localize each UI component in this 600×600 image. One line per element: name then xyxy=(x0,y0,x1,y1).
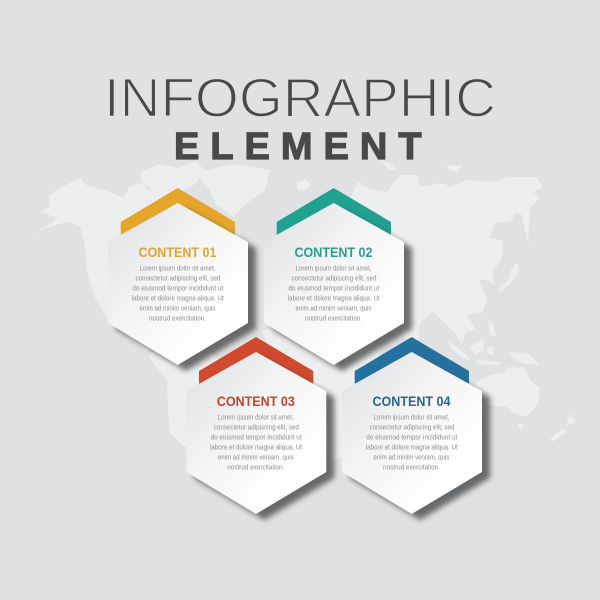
panel: content 03 xyxy=(186,337,334,520)
map: new zealand xyxy=(550,413,576,442)
hexagon card xyxy=(186,352,326,514)
heading: CONTENT 01 xyxy=(138,245,217,260)
title: INFOGRAPHIC xyxy=(104,66,496,128)
heading: CONTENT 03 xyxy=(217,394,295,409)
body text: consectetur adipiscing elit, sed xyxy=(370,422,454,432)
body text: labore et dolore magna aliqua. Ut xyxy=(210,442,302,452)
chevron: blue xyxy=(355,337,469,385)
body text: nostrud exercitation. xyxy=(383,462,440,472)
body text xyxy=(210,412,302,472)
chevron: teal xyxy=(277,188,391,236)
hexagon shadow xyxy=(116,209,256,371)
map: greenland xyxy=(200,164,270,217)
body text: Lorem ipsum dolor sit amet, xyxy=(218,412,294,422)
map: south america xyxy=(148,345,240,450)
body text: nostrud exercitation. xyxy=(149,314,206,322)
map: arctic islands xyxy=(140,161,205,192)
body text: consectetur adipiscing elit, sed xyxy=(292,274,376,282)
map: africa xyxy=(262,325,380,460)
body text: Lorem ipsum dolor sit amet, xyxy=(374,412,450,422)
hexagon shadow xyxy=(272,209,412,371)
body text: do eiusmod tempor incididunt ut xyxy=(288,284,379,292)
heading: CONTENT 02 xyxy=(294,245,373,260)
map: eurasia xyxy=(340,175,543,350)
body text xyxy=(132,264,224,322)
hexagon shadow xyxy=(350,358,490,520)
body text: consectetur adipiscing elit, sed xyxy=(136,274,220,282)
hexagon card xyxy=(342,352,482,514)
chevron: red xyxy=(199,337,313,385)
body text: labore et dolore magna aliqua. Ut xyxy=(288,294,380,302)
panel: content 02 xyxy=(264,188,412,371)
chevron: amber xyxy=(121,188,235,236)
body text: do eiusmod tempor incididunt ut xyxy=(132,284,223,292)
body text: nostrud exercitation. xyxy=(305,314,362,322)
map: japan xyxy=(499,262,519,293)
map: southeast asia islands xyxy=(448,320,540,365)
body text: labore et dolore magna aliqua. Ut xyxy=(366,442,458,452)
body text: Lorem ipsum dolor sit amet, xyxy=(140,264,216,272)
body text: Lorem ipsum dolor sit amet, xyxy=(296,264,372,272)
subtitle: ELEMENT xyxy=(174,126,433,168)
map: iceland xyxy=(297,179,311,191)
map: tasmania xyxy=(517,424,524,431)
body text: do eiusmod tempor incididunt ut xyxy=(211,432,302,442)
world map xyxy=(33,160,576,460)
map: australia xyxy=(475,367,540,417)
body text xyxy=(366,412,458,472)
body text xyxy=(288,264,380,322)
heading: CONTENT 04 xyxy=(372,394,451,409)
body text: enim ad minim veniam, quis xyxy=(140,304,216,312)
body text: enim ad minim veniam, quis xyxy=(296,304,372,312)
body text: labore et dolore magna aliqua. Ut xyxy=(132,294,224,302)
hexagon card xyxy=(108,203,248,365)
panel: content 04 xyxy=(342,337,490,520)
body text: nostrud exercitation. xyxy=(227,462,284,472)
body text: enim ad minim veniam, quis xyxy=(374,452,450,462)
map: north america xyxy=(33,178,200,353)
hexagon shadow xyxy=(194,358,334,520)
body text: consectetur adipiscing elit, sed xyxy=(214,422,299,432)
body text: do eiusmod tempor incididunt ut xyxy=(366,432,457,442)
map: north islands xyxy=(380,160,462,172)
panel: content 01 xyxy=(108,188,256,371)
hexagon card xyxy=(264,203,404,365)
body text: enim ad minim veniam, quis xyxy=(218,452,294,462)
